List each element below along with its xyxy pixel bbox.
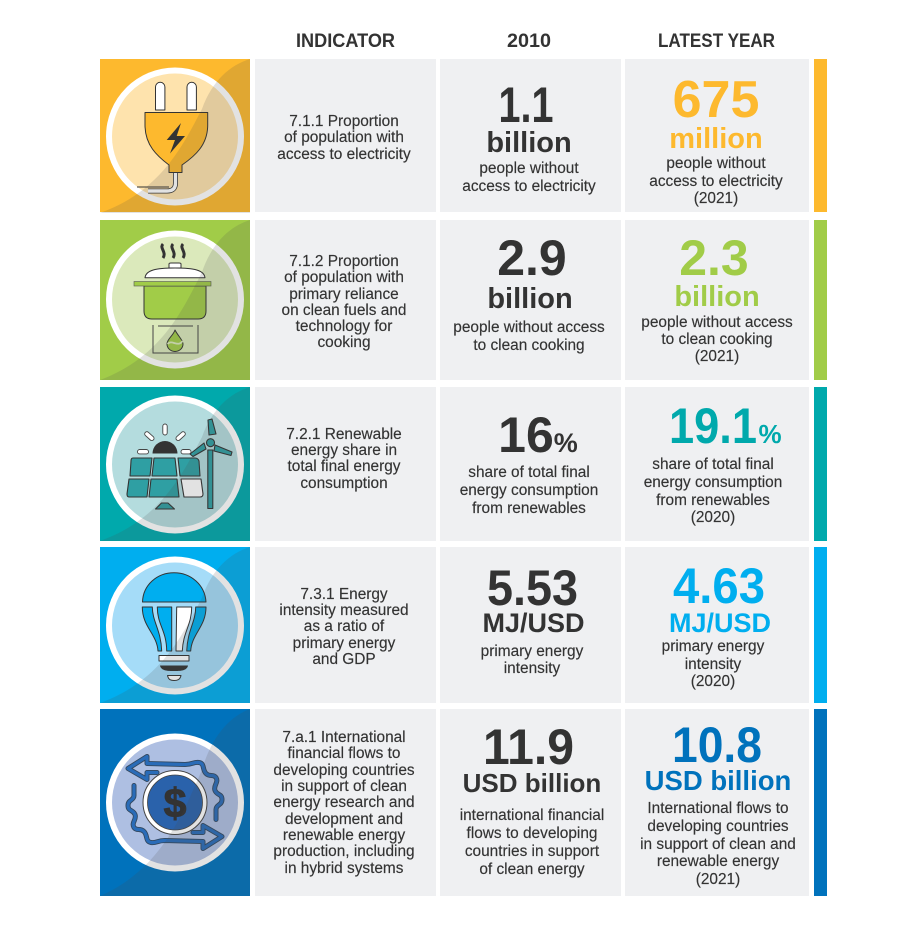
text: indicator 7.a.1: developing countries: [273, 762, 415, 779]
column headings: [296, 30, 775, 52]
stat: latest finance: USD billion: [645, 765, 791, 796]
panel: latest finance: [625, 709, 809, 896]
row: renewables: [100, 387, 827, 541]
stat: latest renewables: 19.1: [669, 398, 757, 454]
text: indicator 7.a.1: renewable energy: [283, 827, 405, 844]
stat: 2010 finance: of clean energy: [479, 861, 585, 878]
text: indicator 7.a.1: production, including: [273, 843, 415, 860]
panel: 2010 finance: [440, 709, 621, 896]
stat: 2010 finance: [460, 719, 604, 878]
column headings: 2010: [507, 30, 551, 52]
text: indicator 7.1.2: technology for: [296, 318, 392, 335]
colour strip: [814, 220, 827, 380]
text: indicator 7.3.1: as a ratio of: [304, 618, 385, 635]
stat: latest intensity: (2020): [691, 673, 735, 690]
stat: latest renewables: (2020): [691, 509, 735, 526]
row: clean cooking: [100, 220, 827, 380]
text: indicator 7.a.1: 7.a.1 International: [282, 729, 406, 746]
stat: latest finance: [640, 717, 796, 888]
stat: 2010 renewables: share of total final: [468, 464, 590, 481]
stat: latest finance: renewable energy: [657, 853, 779, 870]
text: indicator 7.1.2: on clean fuels and: [282, 302, 406, 319]
stat: latest renewables: share of total final: [652, 456, 774, 473]
stat: 2010 intensity: primary energy: [481, 643, 584, 660]
stat: latest renewables: %: [758, 419, 782, 449]
stat: latest intensity: MJ/USD: [669, 608, 771, 638]
text: indicator 7.3.1: [279, 586, 409, 668]
text: indicator 7.1.2: primary reliance: [289, 286, 399, 303]
panel: latest renewables: [625, 387, 809, 541]
text: indicator 7.a.1: development and: [285, 811, 403, 828]
stat: 2010 finance: international financial: [460, 807, 604, 824]
text: indicator 7.1.2: 7.1.2 Proportion: [289, 253, 399, 270]
stat: latest electricity: 675: [673, 71, 759, 129]
stat: 2010 renewables: [460, 407, 598, 517]
icon tile: cooking pot: [100, 220, 250, 380]
panel: indicator 7.a.1: [255, 709, 436, 896]
stat: 2010 finance: USD billion: [463, 768, 601, 798]
stat: latest intensity: 4.63: [673, 558, 765, 614]
icon tile: solar panel and wind turbine: [100, 387, 250, 541]
text: indicator 7.1.1: access to electricity: [277, 146, 411, 163]
text: indicator 7.a.1: energy research and: [273, 794, 415, 811]
stat: latest cooking: people without access: [641, 314, 793, 331]
stat: 2010 cooking: [453, 230, 605, 354]
text: indicator 7.a.1: [273, 729, 415, 877]
colour strip: [814, 59, 827, 212]
stat: latest finance: in support of clean and: [640, 836, 796, 853]
text: indicator 7.a.1: financial flows to: [288, 745, 400, 762]
icon tile: gear, dollar and arrows: [100, 709, 250, 896]
panel: indicator 7.2.1: [255, 387, 436, 541]
stat: 2010 renewables: 16%: [498, 407, 578, 463]
text: indicator 7.3.1: 7.3.1 Energy: [300, 586, 388, 603]
text: indicator 7.1.2: cooking: [317, 334, 371, 351]
text: indicator 7.2.1: [286, 426, 402, 492]
stat: 2010 electricity: [462, 77, 596, 195]
panel: 2010 intensity: [440, 547, 621, 703]
text: indicator 7.1.1: of population with: [284, 129, 404, 146]
stat: 2010 cooking: to clean cooking: [473, 337, 585, 354]
icon tile: plug: [100, 59, 250, 213]
row: energy intensity: [100, 547, 827, 703]
stat: 2010 intensity: [481, 560, 585, 677]
panel: latest cooking: [625, 220, 809, 380]
stat: 2010 electricity: access to electricity: [462, 178, 596, 195]
icon tile: gear, dollar and arrows: $: [164, 780, 187, 826]
colour strip: [814, 709, 827, 896]
text: indicator 7.2.1: consumption: [300, 475, 388, 492]
stat: latest intensity: [662, 558, 771, 690]
column headings: LATEST YEAR: [658, 30, 775, 52]
text: indicator 7.3.1: primary energy: [293, 635, 396, 652]
stat: 2010 electricity: 1.1: [498, 77, 554, 133]
stat: 2010 intensity: 5.53: [487, 560, 578, 616]
stat: latest intensity: primary energy: [662, 638, 765, 655]
stat: 2010 finance: flows to developing: [467, 825, 597, 842]
stat: 2010 intensity: MJ/USD: [482, 608, 585, 638]
panel: latest intensity: [625, 547, 809, 703]
text: indicator 7.a.1: in hybrid systems: [285, 860, 404, 877]
colour strip: [814, 387, 827, 541]
text: indicator 7.1.2: of population with: [284, 269, 404, 286]
row: financial flows: [100, 709, 827, 896]
text: indicator 7.3.1: intensity measured: [279, 602, 409, 619]
panel: 2010 electricity: [440, 59, 621, 212]
text: indicator 7.3.1: and GDP: [312, 651, 376, 668]
stat: 2010 cooking: 2.9: [497, 230, 567, 286]
text: indicator 7.1.1: 7.1.1 Proportion: [289, 113, 399, 130]
stat: latest renewables: energy consumption: [644, 474, 782, 491]
text: indicator 7.2.1: energy share in: [291, 442, 397, 459]
stat: latest finance: International flows to: [647, 800, 789, 817]
stat: 2010 cooking: people without access: [453, 319, 605, 336]
stat: latest finance: 10.8: [672, 717, 762, 773]
text: indicator 7.2.1: 7.2.1 Renewable: [286, 426, 402, 443]
stat: latest cooking: 2.3: [679, 230, 749, 286]
stat: latest electricity: access to electricity: [649, 173, 783, 190]
text: indicator 7.1.1: [277, 113, 411, 163]
panel: indicator 7.1.1: [255, 59, 436, 212]
text: indicator 7.1.2: [282, 253, 406, 351]
panel: indicator 7.1.2: [255, 220, 436, 380]
stat: latest renewables: [644, 398, 782, 526]
stat: latest cooking: to clean cooking: [661, 331, 773, 348]
stat: latest intensity: intensity: [685, 656, 742, 673]
colour strip: [814, 547, 827, 703]
column headings: INDICATOR: [296, 30, 395, 52]
stat: 2010 finance: 11.9: [483, 719, 574, 775]
stat: 2010 electricity: billion: [486, 127, 572, 159]
panel: indicator 7.3.1: [255, 547, 436, 703]
stat: latest electricity: [649, 71, 783, 207]
row: electricity: [100, 59, 827, 213]
stat: latest finance: developing countries: [647, 818, 789, 835]
stat: latest electricity: (2021): [694, 190, 738, 207]
panel: latest electricity: [625, 59, 809, 212]
stat: latest cooking: (2021): [695, 348, 739, 365]
stat: latest cooking: billion: [674, 281, 760, 313]
stat: 2010 finance: countries in support: [465, 843, 600, 860]
stat: 2010 electricity: people without: [479, 160, 579, 177]
text: indicator 7.2.1: total final energy: [288, 458, 401, 475]
stat: 2010 renewables: energy consumption: [460, 482, 598, 499]
stat: latest electricity: million: [669, 123, 763, 155]
icon tile: light bulb: [100, 547, 250, 703]
stat: 2010 renewables: from renewables: [472, 500, 586, 517]
panel: 2010 renewables: [440, 387, 621, 541]
stat: latest electricity: people without: [666, 155, 766, 172]
text: indicator 7.a.1: in support of clean: [281, 778, 407, 795]
stat: latest finance: (2021): [696, 871, 740, 888]
stat: 2010 intensity: intensity: [504, 660, 561, 677]
stat: 2010 cooking: billion: [487, 283, 573, 315]
stat: latest renewables: from renewables: [656, 492, 770, 509]
panel: 2010 cooking: [440, 220, 621, 380]
stat: latest cooking: [641, 230, 793, 365]
